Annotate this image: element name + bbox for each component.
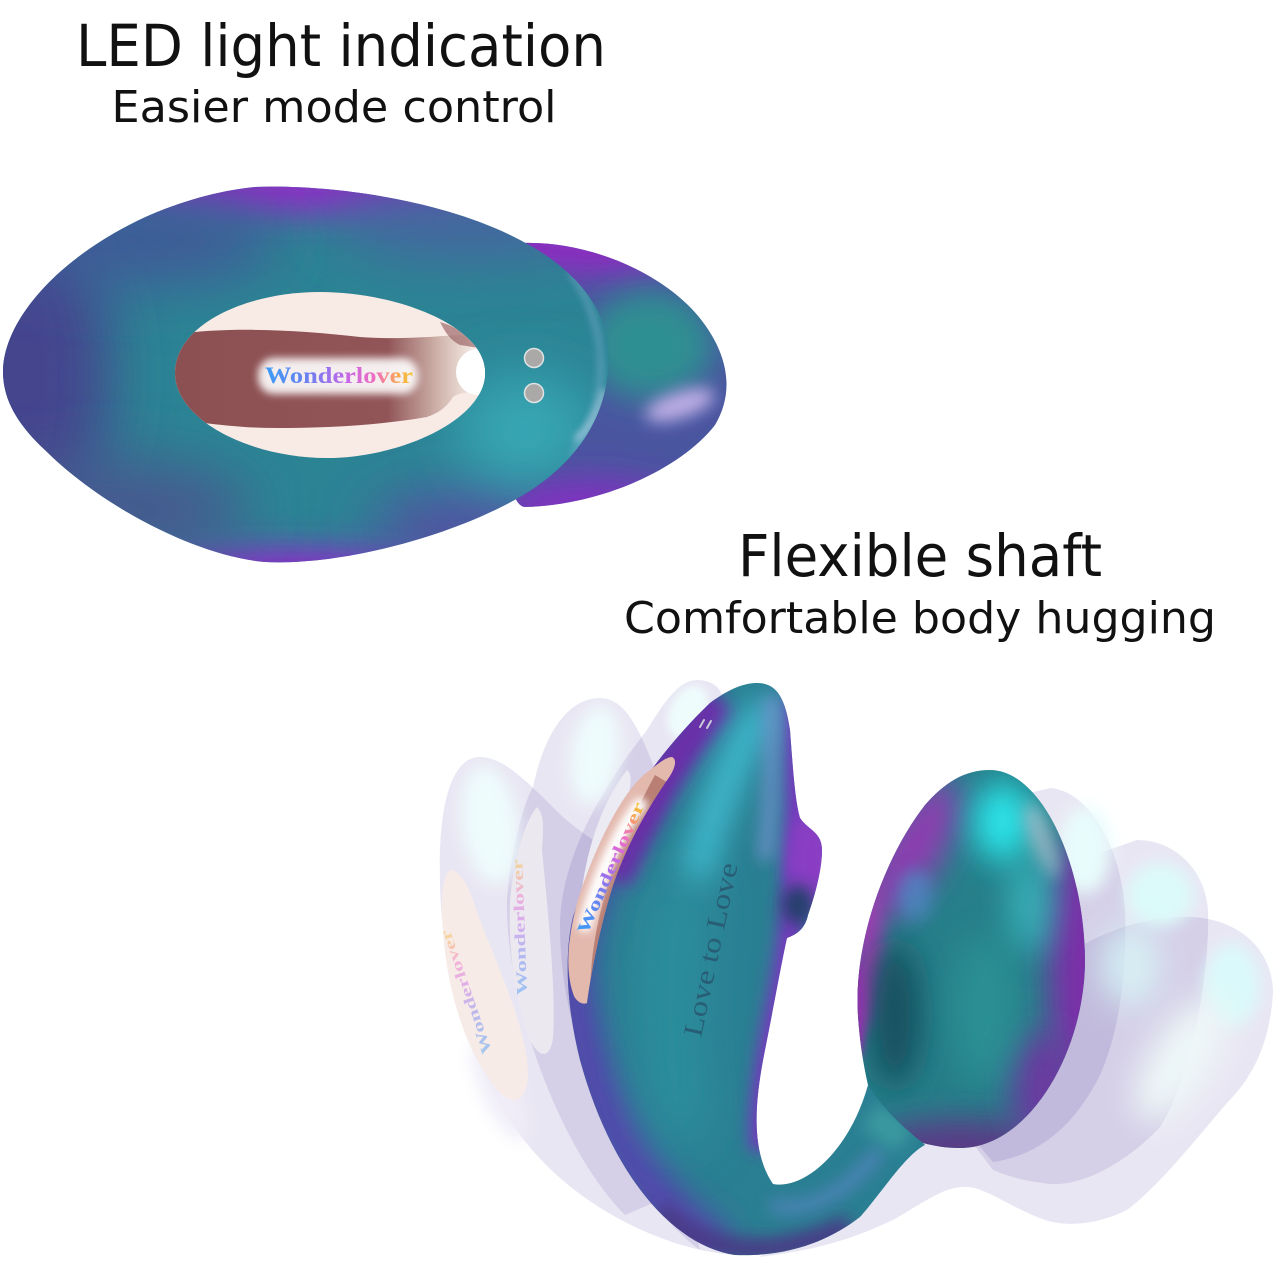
ghost logos — [438, 858, 531, 1056]
device: top view — [3, 186, 726, 562]
rear lobe of top device — [516, 242, 726, 507]
side cutout with logo — [568, 757, 676, 1004]
subtitle: Easier mode control: Easier mode control — [112, 82, 556, 133]
curved shaft body — [568, 683, 925, 1256]
title: LED light indication: LED light indication — [76, 12, 606, 80]
cutout with LED window — [175, 292, 485, 458]
egg end — [858, 770, 1085, 1148]
main body of top device — [3, 186, 608, 562]
ghost cutouts — [442, 870, 528, 1100]
title: Flexible shaft: Flexible shaft — [738, 522, 1102, 590]
motion ghosts: left — [438, 679, 735, 1255]
indicator marks — [700, 720, 711, 728]
control buttons — [524, 348, 544, 402]
logo along the cutout: Wonderlover — [573, 799, 649, 937]
subtitle: Comfortable body hugging: Comfortable body hugging — [624, 593, 1216, 644]
ghost logos: Wonderlover — [510, 858, 531, 995]
engraved text: Love to Love: Love to Love — [678, 860, 744, 1039]
motion ghosts: right — [760, 788, 1273, 1257]
ghost logos: Wonderlover — [438, 927, 496, 1056]
logo: Wonderlover: Wonderlover — [265, 363, 413, 388]
device: flexible shaft with motion ghosts — [438, 670, 1273, 1270]
